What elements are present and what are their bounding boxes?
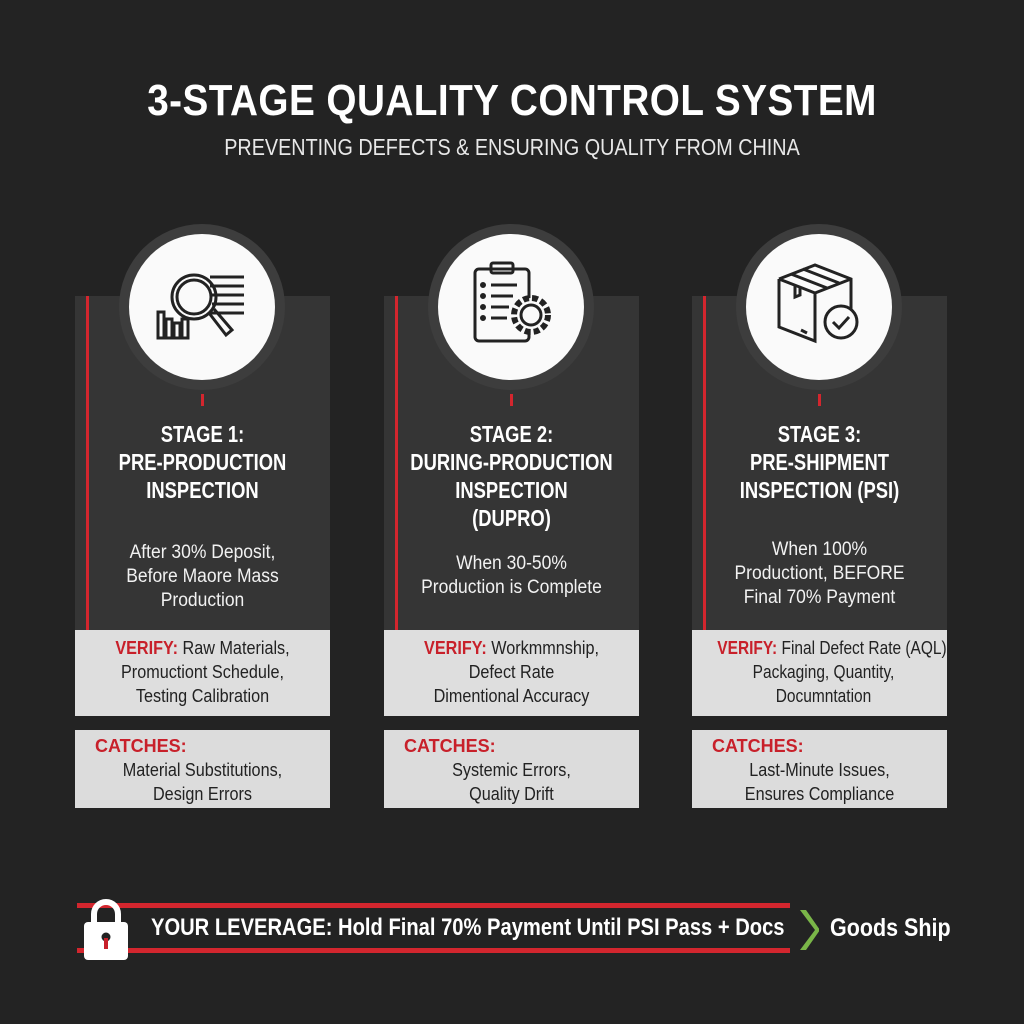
timing text (734, 539, 904, 608)
catches: stage 3: Ensures Compliance (745, 784, 894, 804)
panel: stage 1 (75, 296, 330, 716)
verify box: Testing Calibration (136, 686, 269, 706)
icon: box check (736, 224, 902, 390)
leverage text: YOUR LEVERAGE: Hold Final 70% Payment Until PSI Pass + Docs (151, 914, 785, 941)
catches: stage 2: Systemic Errors, (452, 760, 571, 780)
timing text: Final 70% Payment (744, 587, 895, 608)
verify box (75, 630, 330, 716)
heading: (DUPRO) (472, 505, 551, 531)
catches: stage 1: Design Errors (153, 784, 252, 804)
verify box (384, 630, 639, 716)
goods ship text: Goods Ship (830, 914, 951, 942)
heading: PRE-PRODUCTION (119, 449, 286, 475)
catches: stage 1: CATCHES: (95, 736, 187, 756)
catches: stage 1 (75, 730, 330, 808)
verify box: Promuctiont Schedule, (121, 662, 284, 682)
verify box: Dimentional Accuracy (434, 686, 589, 706)
leverage bar (77, 899, 951, 960)
icon: clipboard gear (428, 224, 594, 390)
catches: stage 2 (384, 730, 639, 808)
verify box: Packaging, Quantity, (753, 662, 894, 682)
timing text (126, 542, 279, 611)
catches: stage 2: Quality Drift (469, 784, 554, 804)
verify box: VERIFY: Final Defect Rate (AQL) (717, 638, 947, 658)
verify box: Documntation (776, 686, 871, 706)
verify box: VERIFY: Workmmnship, (424, 638, 599, 658)
heading: INSPECTION (146, 477, 259, 503)
heading: INSPECTION (455, 477, 568, 503)
verify box: VERIFY: Raw Materials, (115, 638, 290, 658)
panel: stage 2 (384, 296, 639, 716)
timing text (421, 553, 602, 598)
catches: stage 1: Material Substitutions, (123, 760, 282, 780)
icon: lock (84, 899, 128, 960)
catches: stage 2: CATCHES: (404, 736, 496, 756)
timing text: Production is Complete (421, 577, 602, 598)
timing text: Productiont, BEFORE (734, 563, 904, 584)
subtitle: PREVENTING DEFECTS & ENSURING QUALITY FROM CHINA (224, 134, 800, 160)
heading (410, 421, 613, 531)
heading: STAGE 2: (470, 421, 553, 447)
timing text: When 30-50% (456, 553, 567, 574)
heading (740, 421, 899, 503)
heading: PRE-SHIPMENT (750, 449, 889, 475)
timing text: After 30% Deposit, (130, 542, 275, 563)
title: 3-STAGE QUALITY CONTROL SYSTEM (147, 76, 877, 125)
catches: stage 3: Last-Minute Issues, (749, 760, 890, 780)
arrow: green chevron (800, 910, 819, 950)
catches: stage 3 (692, 730, 947, 808)
heading: INSPECTION (PSI) (740, 477, 899, 503)
timing text: Production (161, 590, 244, 611)
icon: magnifier chart (119, 224, 285, 390)
heading: STAGE 3: (778, 421, 861, 447)
verify box (692, 630, 947, 716)
timing text: Before Maore Mass (126, 566, 279, 587)
heading: STAGE 1: (161, 421, 244, 447)
catches: stage 3: CATCHES: (712, 736, 804, 756)
panel: stage 3 (692, 296, 947, 716)
verify box: Defect Rate (469, 662, 554, 682)
heading: DURING-PRODUCTION (410, 449, 613, 475)
timing text: When 100% (772, 539, 867, 560)
heading (119, 421, 286, 503)
